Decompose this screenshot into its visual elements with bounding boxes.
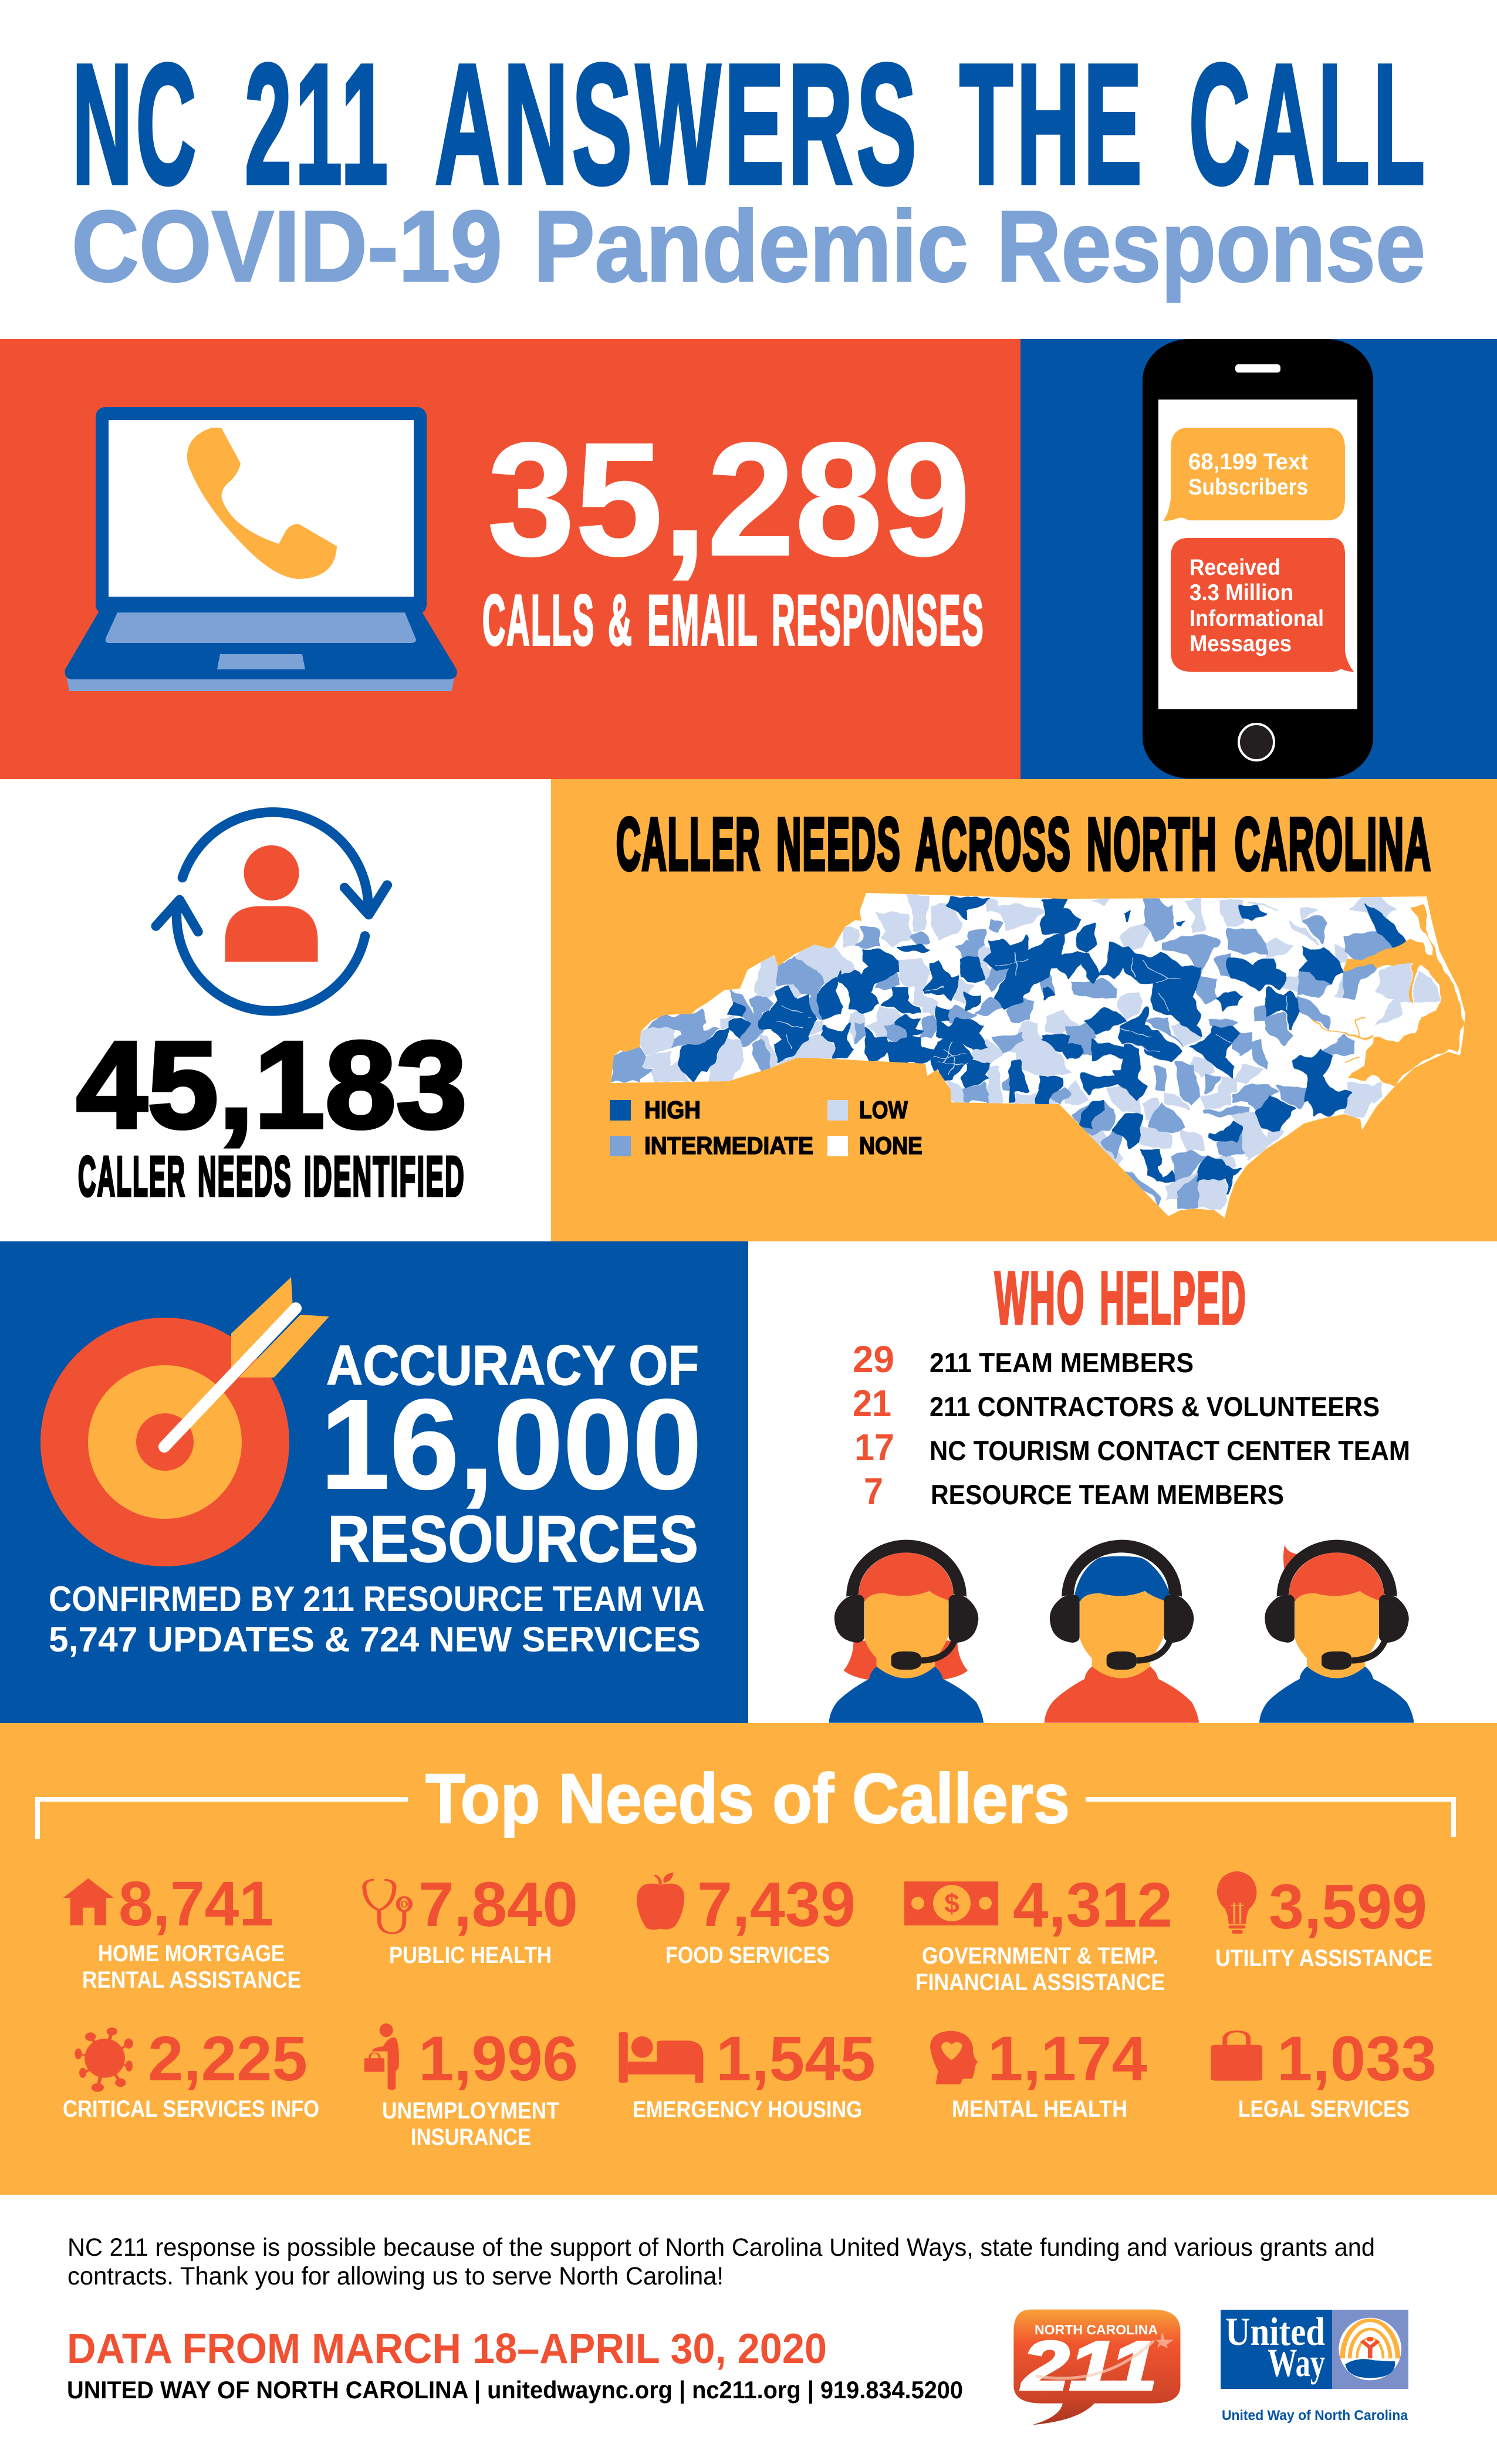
footer: acknowledgement text: [67, 2233, 1375, 2290]
text: accuracy of: ACCURACY OF: [326, 1334, 699, 1397]
illustration: call center agents: [829, 1540, 1414, 1723]
label: calls and email responses: CALLS: [482, 580, 595, 660]
footer: contact line: UNITED WAY OF NORTH CAROLINA | unitedwaync.org | nc211.org | 919.834.5200: [67, 2376, 963, 2404]
message bubble: informational messages: [1171, 538, 1354, 672]
logo: north carolina 211: 211: [1021, 2327, 1157, 2405]
stat: critical services info: CRITICAL SERVICES INFO: [63, 2096, 319, 2122]
panel: caller needs identified: [0, 779, 551, 1241]
icon: apple: [637, 1873, 684, 1930]
text: updates and new services: 5,747 UPDATES & 724 NEW SERVICES: [49, 1620, 701, 1659]
title: NC: [72, 29, 200, 219]
panel: calls and email responses: RESPONSES: [772, 580, 985, 660]
stat: emergency housing: [619, 2023, 876, 2123]
agent 2: [1045, 1540, 1199, 1723]
label: caller needs identified: CALLER: [78, 1145, 186, 1208]
stat: mental health: [930, 2023, 1147, 2122]
icon: banknote: $: [944, 1888, 959, 1918]
text: resources: RESOURCES: [327, 1502, 698, 1576]
agent 3: [1259, 1540, 1414, 1723]
stat: government and temporary financial assistance: 4,312: [1013, 1869, 1172, 1940]
stat: mental health: 1,174: [988, 2023, 1147, 2094]
stat: food services: [637, 1869, 856, 1968]
text: united way of north carolina: United Way of North Carolina: [1222, 2408, 1408, 2424]
heading: caller needs across north carolina: NORTH: [1087, 804, 1218, 885]
title: 211: [245, 29, 391, 219]
icon: target with arrow: [40, 1277, 329, 1566]
footer: data date range: DATA FROM MARCH 18–APRIL 30, 2020: [67, 2326, 827, 2372]
stat: home mortgage rental assistance: [63, 1868, 301, 1993]
logo: united way: Way: [1268, 2340, 1325, 2385]
icon: person with circular arrows: [156, 812, 387, 1011]
list: team counts: 211 TEAM MEMBERS: [930, 1347, 1194, 1378]
stat: utility assistance: 3,599: [1269, 1871, 1427, 1942]
heading: caller needs across north carolina: NEEDS: [776, 804, 901, 885]
list: team counts: [853, 1338, 1410, 1512]
map legend: INTERMEDIATE: [644, 1132, 813, 1159]
stat: home mortgage rental assistance: RENTAL ASSISTANCE: [82, 1967, 301, 1993]
list: team counts: 29: [853, 1338, 894, 1380]
label: calls and email responses: EMAIL: [647, 580, 759, 660]
heading: who helped: WHO: [995, 1257, 1086, 1339]
subtitle: Response: [996, 190, 1425, 303]
stat: 35,289: 35,289: [487, 409, 971, 590]
text: confirmed by resource team: CONFIRMED BY 211 RESOURCE TEAM VIA: [49, 1579, 705, 1619]
stat: home mortgage rental assistance: HOME MORTGAGE: [98, 1941, 285, 1967]
stat: critical services info: 2,225: [148, 2023, 307, 2094]
stat: mental health: MENTAL HEALTH: [952, 2096, 1127, 2122]
agent 1: [829, 1540, 984, 1723]
stat: emergency housing: EMERGENCY HOUSING: [633, 2097, 862, 2123]
panel: accuracy of resources: [0, 1241, 748, 1723]
panel: caller needs identified: IDENTIFIED: [304, 1145, 465, 1208]
footer: acknowledgement text: contracts. Thank you for allowing us to serve North Carolina!: [67, 2262, 724, 2290]
map legend: LOW: [859, 1096, 908, 1123]
message bubble: text subscribers: [1163, 428, 1345, 521]
message bubble: text subscribers: 68,199 Text: [1188, 449, 1308, 475]
stat: unemployment insurance: 1,996: [418, 2023, 578, 2094]
message bubble: informational messages: Informational: [1190, 606, 1324, 631]
heading: top needs of callers: Top Needs of Callers: [425, 1759, 1070, 1838]
icon: bed: [619, 2032, 703, 2083]
stat: unemployment insurance: INSURANCE: [411, 2124, 531, 2150]
stat: legal services: 1,033: [1277, 2023, 1437, 2094]
stat: unemployment insurance: [364, 2023, 578, 2150]
label: caller needs identified: [78, 1145, 465, 1208]
icon: head with heart: [930, 2031, 978, 2084]
stat: food services: 7,439: [697, 1869, 856, 1940]
stat: 16,000: 16,000: [320, 1373, 702, 1516]
list: team counts: NC TOURISM CONTACT CENTER TEAM: [930, 1435, 1410, 1466]
icon: house: [63, 1879, 114, 1925]
stat: home mortgage rental assistance: 8,741: [119, 1868, 273, 1939]
map legend: [610, 1096, 922, 1159]
logo: north carolina 211: [1013, 2310, 1180, 2425]
label: calls and email responses: [482, 580, 985, 660]
icon: laptop with phone handset: [65, 407, 457, 691]
icon: virus: [75, 2028, 133, 2092]
stat: government and temporary financial assistance: [904, 1869, 1172, 1995]
heading: caller needs across north carolina: [616, 804, 1432, 885]
heading: caller needs across north carolina: CALLER: [616, 804, 761, 885]
list: team counts: RESOURCE TEAM MEMBERS: [931, 1479, 1284, 1510]
title: ANSWERS: [435, 29, 920, 219]
panel: who helped: HELPED: [1100, 1257, 1247, 1339]
stat: utility assistance: UTILITY ASSISTANCE: [1215, 1945, 1432, 1971]
footer: acknowledgement text: NC 211 response is possible because of the support of North Carolina United Ways, state funding and various grants and: [67, 2233, 1375, 2262]
stat: critical services info: [63, 2023, 319, 2122]
choropleth map of north carolina: [604, 886, 1473, 1226]
logo: north carolina 211: NORTH CAROLINA: [1035, 2322, 1158, 2337]
label: caller needs identified: NEEDS: [198, 1145, 292, 1208]
subtitle: [72, 190, 1425, 303]
icon: person with briefcase: [364, 2023, 399, 2090]
stat: 45,183: 45,183: [76, 1016, 467, 1154]
title: [72, 29, 1428, 219]
stat: unemployment insurance: UNEMPLOYMENT: [382, 2098, 559, 2124]
message bubble: informational messages: 3.3 Million: [1190, 580, 1293, 605]
list: team counts: 21: [853, 1382, 891, 1424]
stat: legal services: LEGAL SERVICES: [1238, 2096, 1410, 2122]
map legend: HIGH: [644, 1096, 701, 1123]
message bubble: text subscribers: Subscribers: [1188, 475, 1308, 500]
label: calls and email responses: &: [608, 580, 633, 660]
subtitle: Pandemic: [533, 190, 968, 303]
icon: smartphone: [1143, 339, 1373, 779]
heading bracket: [38, 1799, 1454, 1839]
panel: calls and email responses: [0, 339, 1020, 779]
stat: government and temporary financial assistance: GOVERNMENT & TEMP.: [922, 1943, 1158, 1969]
list: team counts: 211 CONTRACTORS & VOLUNTEERS: [930, 1391, 1380, 1422]
stat: utility assistance: [1215, 1871, 1432, 1971]
subtitle: COVID-19: [72, 190, 502, 303]
panel: top needs of callers: [0, 1723, 1497, 2195]
stat: public health: PUBLIC HEALTH: [389, 1942, 552, 1968]
icon: stethoscope: [364, 1880, 411, 1933]
message bubble: informational messages: Received: [1190, 555, 1280, 580]
panel: who helped: [748, 1241, 1497, 1723]
stat: emergency housing: 1,545: [716, 2023, 876, 2094]
stat: public health: 7,840: [418, 1869, 578, 1940]
stat: food services: FOOD SERVICES: [665, 1942, 830, 1968]
stat: government and temporary financial assistance: FINANCIAL ASSISTANCE: [915, 1969, 1165, 1995]
title: THE: [959, 29, 1145, 219]
panel: text messaging: [1020, 339, 1497, 779]
icon: briefcase: [1211, 2032, 1262, 2081]
logo: united way: United: [1225, 2309, 1325, 2354]
stat: legal services: [1211, 2023, 1437, 2122]
list: team counts: 7: [864, 1470, 883, 1512]
icon: banknote: [904, 1881, 998, 1925]
heading: caller needs across north carolina: ACROSS: [915, 804, 1072, 885]
panel: caller needs map: [551, 779, 1497, 1241]
message bubble: informational messages: Messages: [1190, 631, 1292, 656]
list: team counts: 17: [854, 1426, 894, 1468]
logo: united way: [1221, 2309, 1408, 2424]
stat: public health: [364, 1869, 578, 1968]
icon: light bulb: [1217, 1871, 1256, 1934]
icon: united way rainbow hand: [1339, 2318, 1401, 2380]
map legend: NONE: [859, 1132, 922, 1159]
